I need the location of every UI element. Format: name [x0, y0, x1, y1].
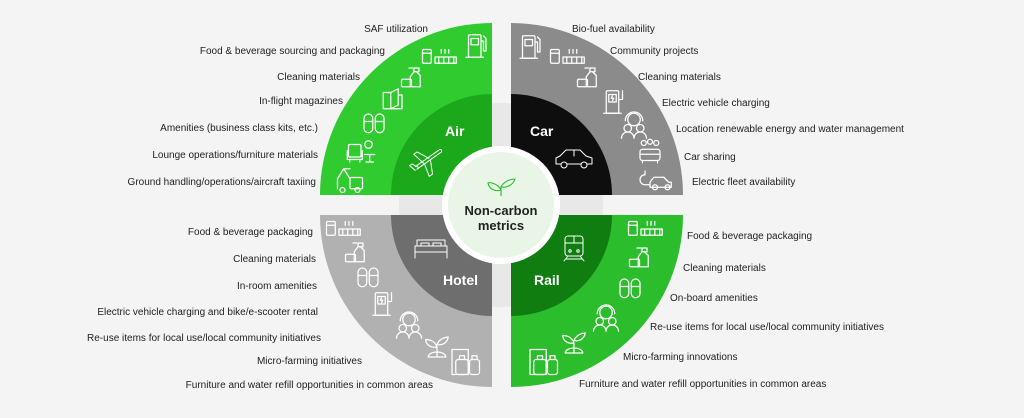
labels: car: Community projects: [610, 46, 698, 57]
panel: air: Air: [445, 123, 465, 139]
labels: air: In-flight magazines: [259, 96, 343, 107]
icon: leaves: [488, 179, 515, 196]
labels: rail: Re-use items for local use/local community initiatives: [650, 322, 884, 333]
labels: air: Food & beverage sourcing and packaging: [200, 46, 385, 57]
labels: hotel: Cleaning materials: [233, 254, 316, 265]
labels: hotel: Food & beverage packaging: [188, 227, 313, 238]
panel: car: [511, 23, 683, 195]
labels: car: Electric fleet availability: [692, 177, 795, 188]
labels: rail: Cleaning materials: [683, 263, 766, 274]
panel: car: Car: [530, 123, 554, 139]
labels: rail: [579, 231, 884, 390]
labels: air: Amenities (business class kits, etc.): [160, 123, 318, 134]
center circle: metrics: [478, 218, 524, 233]
labels: car: Bio-fuel availability: [572, 24, 655, 35]
labels: rail: Food & beverage packaging: [687, 231, 812, 242]
labels: hotel: Electric vehicle charging and bike/e-scooter rental: [97, 307, 318, 318]
labels: car: [572, 24, 904, 188]
icon: car: [556, 150, 592, 168]
labels: rail: On-board amenities: [670, 293, 758, 304]
labels: car: Cleaning materials: [638, 72, 721, 83]
panel: hotel: [320, 215, 492, 387]
center circle: [442, 146, 560, 264]
labels: hotel: [87, 227, 433, 391]
labels: rail: Furniture and water refill opportunities in common areas: [579, 379, 826, 390]
labels: car: Location renewable energy and water management: [676, 124, 904, 135]
labels: hotel: Micro-farming initiatives: [257, 356, 362, 367]
labels: air: [128, 24, 428, 188]
inner gap disc: [399, 103, 603, 307]
labels: car: Electric vehicle charging: [662, 98, 770, 109]
labels: hotel: Furniture and water refill opportunities in common areas: [186, 380, 433, 391]
labels: air: Lounge operations/furniture materials: [152, 150, 318, 161]
panel: hotel: Hotel: [443, 272, 478, 288]
labels: hotel: In-room amenities: [237, 281, 317, 292]
panel: air: [320, 23, 492, 195]
icon: bed: [415, 240, 447, 258]
icon: plane: [406, 140, 450, 182]
icon: train: [564, 236, 584, 261]
panel: rail: [511, 215, 683, 387]
labels: air: SAF utilization: [364, 24, 428, 35]
labels: air: Ground handling/operations/aircraft taxiing: [128, 177, 316, 188]
labels: car: Car sharing: [684, 152, 736, 163]
labels: air: Cleaning materials: [277, 72, 360, 83]
labels: hotel: Re-use items for local use/local community initiatives: [87, 333, 321, 344]
labels: rail: Micro-farming innovations: [623, 352, 738, 363]
panel: rail: Rail: [534, 272, 560, 288]
center circle: Non-carbon: [465, 203, 538, 218]
